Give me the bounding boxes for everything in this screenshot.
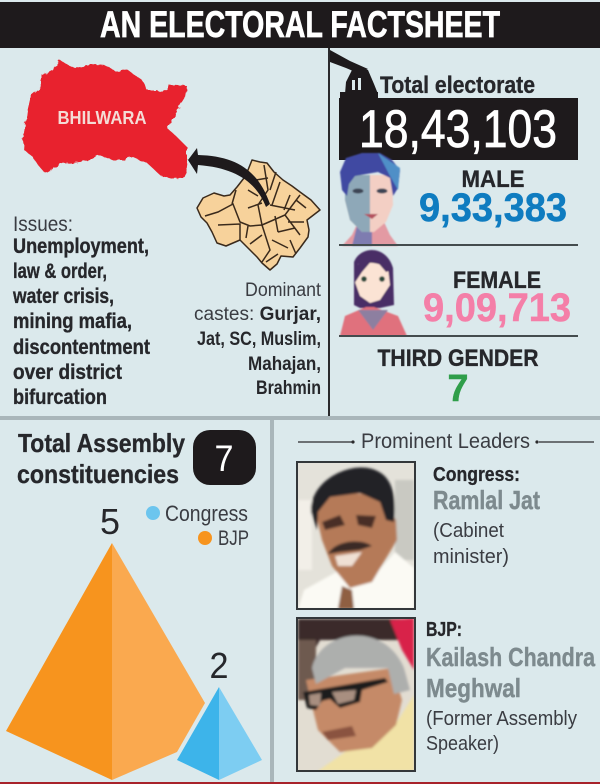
icon: ballot hand <box>330 50 378 99</box>
heading <box>298 430 594 453</box>
male label: MALE <box>462 166 524 193</box>
heading: Prominent Leaders <box>361 430 530 453</box>
panel: electorate <box>330 50 578 410</box>
BJP leader text: BJP: <box>426 619 462 641</box>
photo: Ramlal Jat <box>297 462 415 609</box>
issues text: mining mafia, <box>13 310 132 333</box>
issues text: law & order, <box>13 260 107 283</box>
Bhilwara map: BHILWARA <box>58 108 146 128</box>
Congress leader text: Congress: <box>433 464 520 486</box>
Rajasthan map <box>197 160 320 270</box>
count badge <box>193 430 256 485</box>
issues text: bifurcation <box>13 386 107 409</box>
BJP leader text <box>426 619 595 755</box>
panel: assembly constituencies <box>6 428 262 780</box>
issues text: over district <box>13 361 122 384</box>
Bhilwara map <box>23 60 187 178</box>
third gender label: THIRD GENDER <box>378 345 538 372</box>
BJP pyramid: 5 <box>100 501 120 542</box>
icon: female face <box>340 250 407 336</box>
legend: Congress <box>165 501 248 526</box>
dominant castes text: Mahajan, <box>248 354 321 375</box>
arrow <box>188 148 270 207</box>
male number: 9,33,383 <box>419 186 567 230</box>
dominant castes text: Dominant <box>245 280 322 301</box>
Congress leader text: (Cabinet <box>433 520 504 542</box>
panel: prominent leaders <box>297 430 595 771</box>
legend: BJP <box>218 527 249 550</box>
heading <box>17 428 185 489</box>
legend <box>146 501 249 550</box>
BJP leader text: Meghwal <box>426 673 521 703</box>
BJP leader text: (Former Assembly <box>426 708 577 730</box>
total electorate number: 18,43,103 <box>359 100 557 159</box>
BJP pyramid <box>6 501 205 780</box>
third gender number: 7 <box>448 368 468 410</box>
issues text: Unemployment, <box>13 235 149 258</box>
Congress pyramid: 2 <box>210 645 228 686</box>
icon: male face <box>340 153 400 246</box>
Congress pyramid <box>177 645 262 780</box>
dominant castes text: Jat, SC, Muslim, <box>197 329 321 350</box>
female number: 9,09,713 <box>423 286 571 330</box>
issues text: Issues: <box>13 213 73 236</box>
Congress leader text: minister) <box>433 546 509 568</box>
count badge: 7 <box>214 438 234 479</box>
dominant castes text: castes: Gurjar, <box>194 304 321 325</box>
heading: constituencies <box>17 459 179 489</box>
Congress leader text: Ramlal Jat <box>433 485 540 515</box>
photo: Kailash Chandra Meghwal <box>297 618 415 771</box>
issues text: discontentment <box>13 336 150 359</box>
issues text: water crisis, <box>12 285 114 308</box>
dominant castes text: Brahmin <box>256 378 321 399</box>
Congress leader text <box>433 464 540 568</box>
dominant castes text <box>194 280 322 399</box>
heading: Total Assembly <box>18 428 185 458</box>
total electorate label: Total electorate <box>380 72 535 99</box>
issues text <box>12 213 150 409</box>
BJP leader text: Speaker) <box>426 733 499 755</box>
female label: FEMALE <box>453 267 541 294</box>
panel: district map <box>12 60 322 409</box>
